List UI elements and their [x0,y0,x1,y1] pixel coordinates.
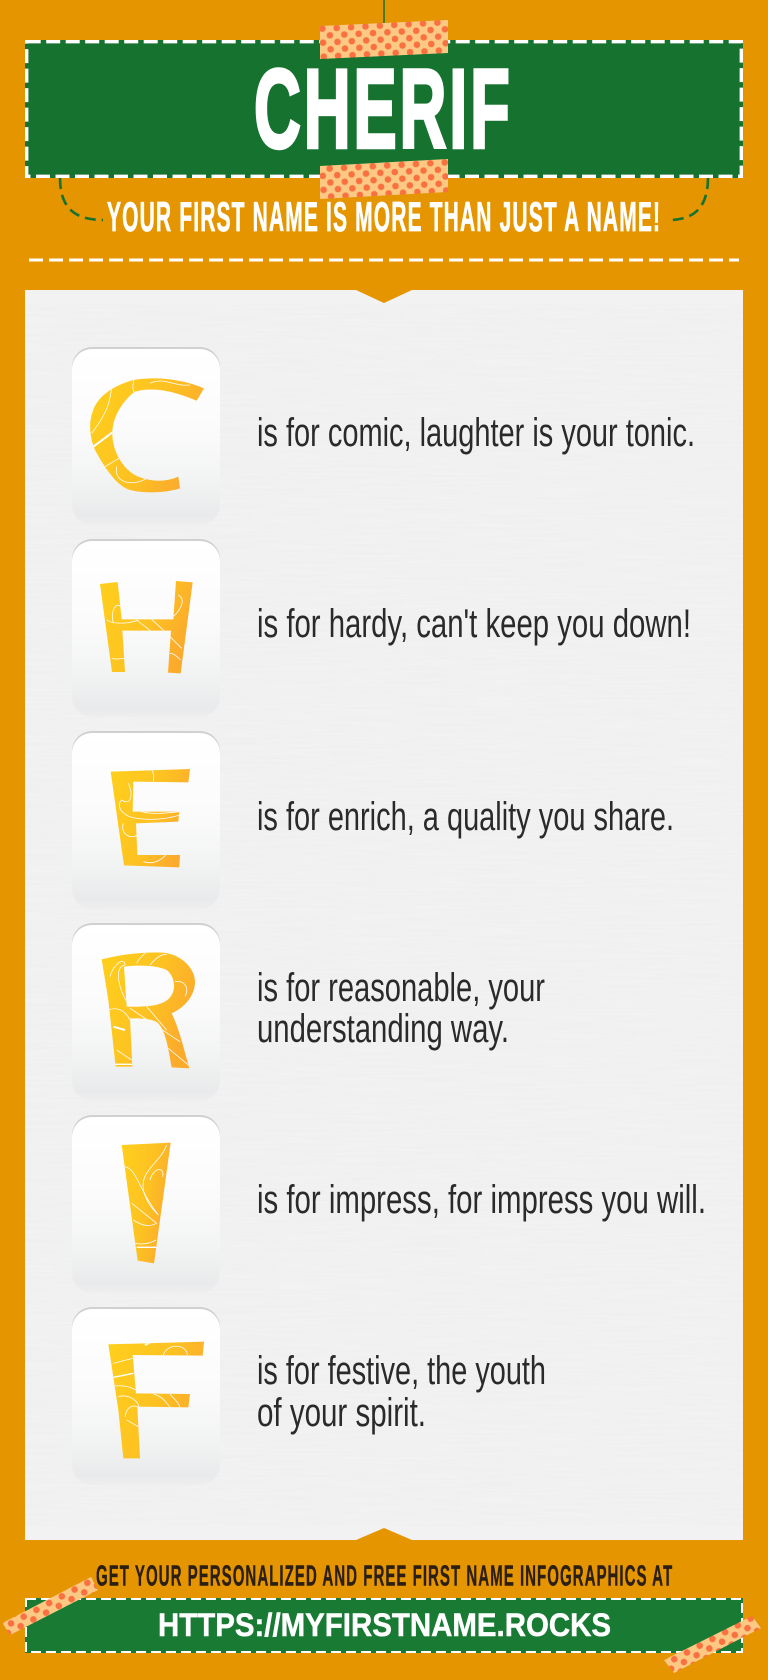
letter H [100,581,193,673]
card: I [72,1115,220,1293]
row: R [72,923,545,1101]
letter E [111,769,190,867]
footer call to action: GET YOUR PERSONALIZED AND FREE FIRST NAME INFOGRAPHICS AT [96,1559,672,1592]
right curved stitch [669,178,708,220]
card: H [72,539,220,717]
row: C [72,347,695,525]
text: R: is for reasonable, your [257,966,545,1010]
left curved stitch [60,178,103,220]
card: F [72,1307,220,1485]
tape: banner top [320,20,448,59]
row: E [72,731,674,909]
text: R [257,966,545,1051]
text: F: is for festive, the youth [257,1349,546,1393]
title: CHERIF [254,47,510,172]
text: F: of your spirit. [257,1391,426,1435]
letter I [122,1143,171,1263]
panel: letters [25,290,743,1540]
text: F [257,1349,546,1435]
row: H [72,539,691,717]
card: R [72,923,220,1101]
tape: footer left [2,1577,98,1635]
url: HTTPS://MYFIRSTNAME.ROCKS [158,1607,611,1643]
hanging thread [383,0,385,24]
footer banner [25,1598,743,1653]
letter C [90,378,204,492]
letter R [102,952,195,1068]
dashed divider [29,258,739,262]
subtitle: YOUR FIRST NAME IS MORE THAN JUST A NAME! [107,194,660,241]
row: F [72,1307,546,1485]
card: C [72,347,220,525]
row: I [72,1115,706,1293]
text: R: understanding way. [257,1007,509,1051]
card: E [72,731,220,909]
tape: banner bottom [320,159,448,199]
tape: footer right [664,1616,761,1673]
title banner [25,40,743,178]
letter F [108,1340,204,1458]
